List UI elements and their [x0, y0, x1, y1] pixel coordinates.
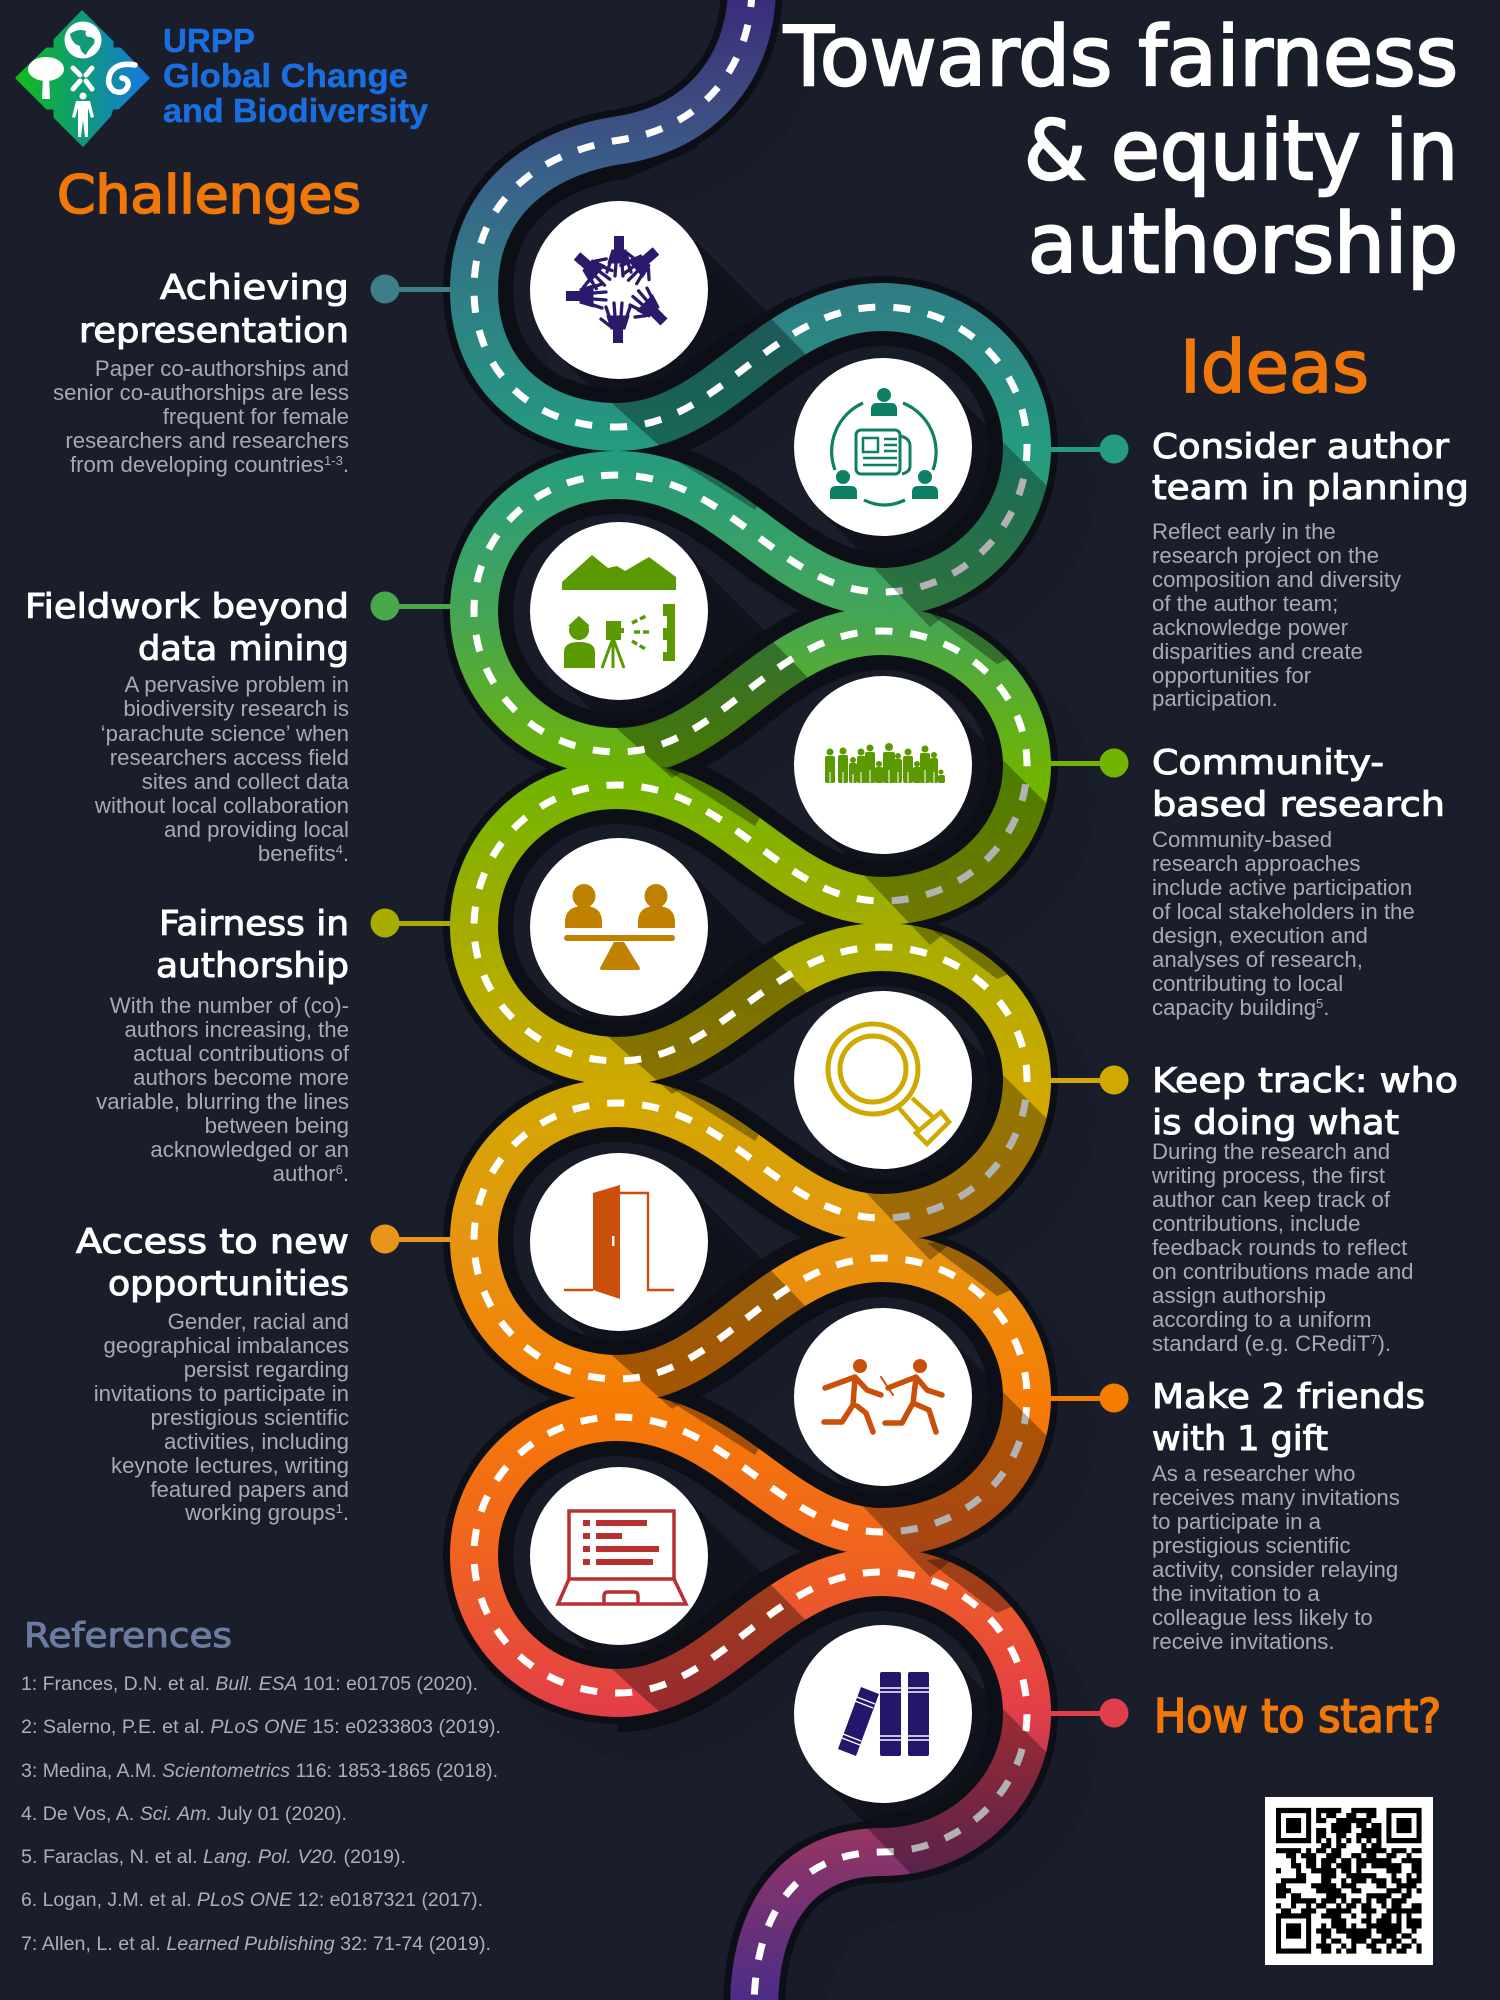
challenge 4 text: working groups — [184, 1500, 349, 1525]
idea 4 heading — [1152, 1377, 1425, 1459]
connector: how to start — [1048, 1698, 1128, 1728]
challenge 2 text: 4 — [336, 842, 343, 857]
white circle 8 — [794, 1308, 972, 1486]
idea 1 text: research project on the — [1152, 543, 1379, 568]
icon: fieldwork — [562, 555, 676, 668]
challenge 4 text: geographical imbalances — [104, 1333, 349, 1358]
road dark casing — [474, 0, 1027, 2000]
challenge 2 text: A pervasive problem in — [125, 672, 349, 697]
connector: idea 2 — [1048, 748, 1128, 778]
logo tree — [28, 57, 64, 99]
challenge 3 heading: authorship — [156, 946, 349, 986]
challenge 1 heading — [79, 268, 349, 351]
idea 1 text: composition and diversity — [1152, 567, 1402, 592]
challenge 2 text: . — [343, 841, 349, 866]
challenge 4 text: . — [343, 1500, 349, 1525]
reference list: 7: Allen, L. et al. Learned Publishing 32: 71-74 (2019). — [21, 1934, 491, 1955]
challenge 2 heading — [25, 587, 349, 669]
logo human figure — [72, 92, 94, 137]
challenge 1 text: from developing countries — [70, 452, 349, 477]
challenge 2 text: ‘parachute science’ when — [101, 721, 349, 746]
icon: open door — [564, 1185, 674, 1299]
idea 1 heading: team in planning — [1152, 468, 1469, 508]
reference list: 3: Medina, A.M. Scientometrics 116: 1853-1865 (2018). — [21, 1761, 498, 1782]
challenge 2 heading: data mining — [138, 629, 349, 669]
circle long shadows inside loops — [619, 290, 1082, 1914]
idea 2 text: 5 — [1316, 996, 1323, 1011]
challenge 4 text: 1 — [336, 1501, 343, 1516]
white circle 3 — [530, 522, 708, 700]
idea 1 text: acknowledge power — [1152, 615, 1349, 640]
challenge 4 text: invitations to participate in — [94, 1381, 349, 1406]
icon: joined hands — [566, 236, 672, 343]
idea 4 text: activity, consider relaying — [1152, 1557, 1398, 1582]
connector: challenge 1 — [370, 274, 451, 304]
icon: relay runners — [824, 1359, 942, 1432]
challenge 3 text: actual contributions of — [133, 1041, 350, 1066]
idea 3 text: according to a uniform — [1152, 1307, 1372, 1332]
idea 4 text: As a researcher who — [1152, 1461, 1355, 1486]
idea 3 heading: is doing what — [1152, 1103, 1399, 1143]
challenge 4 heading: Access to new — [76, 1222, 349, 1262]
white circle 1 — [530, 201, 708, 379]
white circle 10 — [794, 1625, 972, 1803]
road centre dashes — [474, 0, 1027, 2000]
idea 2 text: Community-based — [1152, 827, 1332, 852]
challenge 3 heading — [156, 904, 349, 986]
challenge 1 text: Paper co-authorships and — [95, 356, 349, 381]
idea 3 text: feedback rounds to reflect — [1152, 1235, 1407, 1260]
connector: idea 4 — [1048, 1384, 1128, 1412]
challenge 1 text: frequent for female — [163, 404, 349, 429]
heading: How to start: How to start? — [1154, 1689, 1441, 1743]
idea 4 text: to participate in a — [1152, 1509, 1322, 1534]
idea 1 text: disparities and create — [1152, 639, 1363, 664]
idea 2 text: research approaches — [1152, 851, 1360, 876]
idea 3 text: author can keep track of — [1152, 1187, 1391, 1212]
reference list: 4. De Vos, A. Sci. Am. July 01 (2020). — [21, 1804, 347, 1825]
title: Towards fairness — [783, 10, 1458, 105]
challenge 4 text: persist regarding — [184, 1357, 349, 1382]
challenge 3 text: 6 — [336, 1162, 343, 1177]
heading: Ideas: Ideas — [1180, 325, 1369, 409]
idea 4 text: receive invitations. — [1152, 1629, 1335, 1654]
challenge 1 text: . — [343, 452, 349, 477]
challenge 1 text: researchers and researchers — [65, 428, 349, 453]
logo wordmark: Global Change — [163, 57, 408, 94]
idea 4 text: receives many invitations — [1152, 1485, 1400, 1510]
idea 3 text: 7 — [1370, 1332, 1378, 1347]
icon: author team around a paper — [830, 388, 938, 505]
idea 3 heading — [1152, 1061, 1458, 1143]
white circle 2 — [794, 358, 972, 536]
idea 3 text: on contributions made and — [1152, 1259, 1414, 1284]
idea 3 heading: Keep track: who — [1152, 1061, 1458, 1101]
challenge 4 text: keynote lectures, writing — [111, 1453, 349, 1478]
references heading: References — [24, 1616, 232, 1656]
icon: laptop with text lines — [558, 1511, 686, 1604]
icon: community crowd — [825, 743, 945, 783]
idea 2 text: include active participation — [1152, 875, 1412, 900]
challenge 1 heading: Achieving — [160, 268, 349, 308]
icon: balance scale with two people — [564, 884, 675, 970]
road shadows, right loops — [863, 442, 1046, 1874]
challenge 3 text: between being — [205, 1113, 349, 1138]
connector: idea 3 — [1048, 1066, 1128, 1094]
idea 2 text: analyses of research, — [1152, 947, 1363, 972]
idea 1 heading — [1152, 427, 1469, 508]
logo spiral — [109, 64, 135, 92]
idea 1 heading: Consider author — [1152, 427, 1449, 467]
idea 2 heading: based research — [1152, 785, 1445, 825]
challenge 4 heading: opportunities — [108, 1264, 349, 1304]
challenge 2 text: biodiversity research is — [123, 696, 349, 721]
idea 4 text: the invitation to a — [1152, 1581, 1320, 1606]
challenge 2 text: researchers access field — [110, 745, 349, 770]
reference list: 2: Salerno, P.E. et al. PLoS ONE 15: e0233803 (2019). — [21, 1717, 501, 1738]
challenge 2 text: benefits — [258, 841, 349, 866]
winding road — [474, 0, 1075, 2000]
idea 3 text: writing process, the first — [1151, 1163, 1385, 1188]
challenge 3 text: With the number of (co)- — [110, 993, 349, 1018]
challenge 2 heading: Fieldwork beyond — [25, 587, 349, 627]
heading: Challenges: Challenges — [57, 165, 361, 226]
reference list: 5. Faraclas, N. et al. Lang. Pol. V20. (2019). — [21, 1847, 406, 1868]
icon: magnifying glass — [828, 1024, 949, 1144]
QR code — [1265, 1797, 1433, 1965]
connector: challenge 2 — [370, 592, 451, 620]
challenge 1 text: senior co-authorships are less — [53, 380, 349, 405]
idea 4 heading: Make 2 friends — [1152, 1377, 1425, 1417]
road long shadow — [508, 24, 1061, 2000]
title: & equity in — [1024, 104, 1458, 199]
connector: challenge 3 — [370, 908, 451, 938]
challenge 1 heading: representation — [79, 311, 349, 351]
white circle 7 — [530, 1153, 708, 1331]
challenge 3 text: author — [273, 1161, 349, 1186]
idea 3 text: contributions, include — [1152, 1211, 1360, 1236]
icon: books — [838, 1672, 929, 1756]
challenge 3 text: authors increasing, the — [125, 1017, 349, 1042]
idea 4 heading: with 1 gift — [1152, 1419, 1328, 1459]
challenge 3 text: variable, blurring the lines — [96, 1089, 349, 1114]
logo arrows — [73, 68, 92, 89]
idea 2 text: contributing to local — [1152, 971, 1343, 996]
idea 3 text: assign authorship — [1152, 1283, 1326, 1308]
white circle 9 — [530, 1467, 708, 1645]
logo wordmark — [163, 22, 429, 129]
challenge 3 text: . — [343, 1161, 349, 1186]
idea 2 text: of local stakeholders in the — [1152, 899, 1415, 924]
idea 1 text: opportunities for — [1152, 663, 1312, 688]
logo emblem — [17, 12, 148, 145]
idea 2 heading — [1152, 743, 1445, 825]
reference list: 6. Logan, J.M. et al. PLoS ONE 12: e0187321 (2017). — [21, 1890, 483, 1911]
logo globe — [64, 22, 102, 58]
idea 1 text: Reflect early in the — [1152, 519, 1336, 544]
white circle 4 — [794, 676, 972, 854]
challenge 1 text: 1-3 — [324, 453, 343, 468]
idea 2 heading: Community- — [1152, 743, 1384, 783]
connector: challenge 4 — [370, 1224, 451, 1254]
idea 4 text: prestigious scientific — [1152, 1533, 1351, 1558]
challenge 3 heading: Fairness in — [159, 904, 349, 944]
white circle 6 — [794, 991, 972, 1169]
idea 4 text: colleague less likely to — [1152, 1605, 1373, 1630]
title — [783, 10, 1458, 292]
idea 3 text: standard (e.g. CRediT — [1152, 1331, 1391, 1356]
idea 3 text: ). — [1378, 1331, 1391, 1356]
challenge 4 text: prestigious scientific — [150, 1405, 349, 1430]
idea 1 text: of the author team; — [1152, 591, 1338, 616]
reference list: 1: Frances, D.N. et al. Bull. ESA 101: e01705 (2020). — [21, 1674, 478, 1695]
challenge 2 text: sites and collect data — [142, 769, 350, 794]
challenge 2 text: and providing local — [164, 817, 349, 842]
challenge 3 text: acknowledged or an — [150, 1137, 349, 1162]
challenge 4 text: activities, including — [164, 1429, 349, 1454]
title: authorship — [1028, 197, 1458, 292]
connector: idea 1 — [1048, 434, 1128, 464]
challenge 4 text: featured papers and — [150, 1477, 349, 1502]
road shadows, left loops — [608, 319, 1012, 1711]
challenge 3 text: authors become more — [133, 1065, 349, 1090]
idea 3 text: During the research and — [1152, 1139, 1390, 1164]
reference list — [21, 1674, 501, 1955]
logo wordmark: and Biodiversity — [163, 92, 429, 129]
idea 2 text: . — [1323, 995, 1329, 1020]
challenge 4 heading — [76, 1222, 349, 1304]
logo wordmark: URPP — [163, 22, 255, 59]
idea 1 text: participation. — [1152, 686, 1278, 711]
idea 2 text: design, execution and — [1152, 923, 1368, 948]
challenge 4 text: Gender, racial and — [168, 1309, 349, 1334]
challenge 2 text: without local collaboration — [94, 793, 349, 818]
white circle 5 — [530, 838, 708, 1016]
idea 2 text: capacity building — [1152, 995, 1329, 1020]
